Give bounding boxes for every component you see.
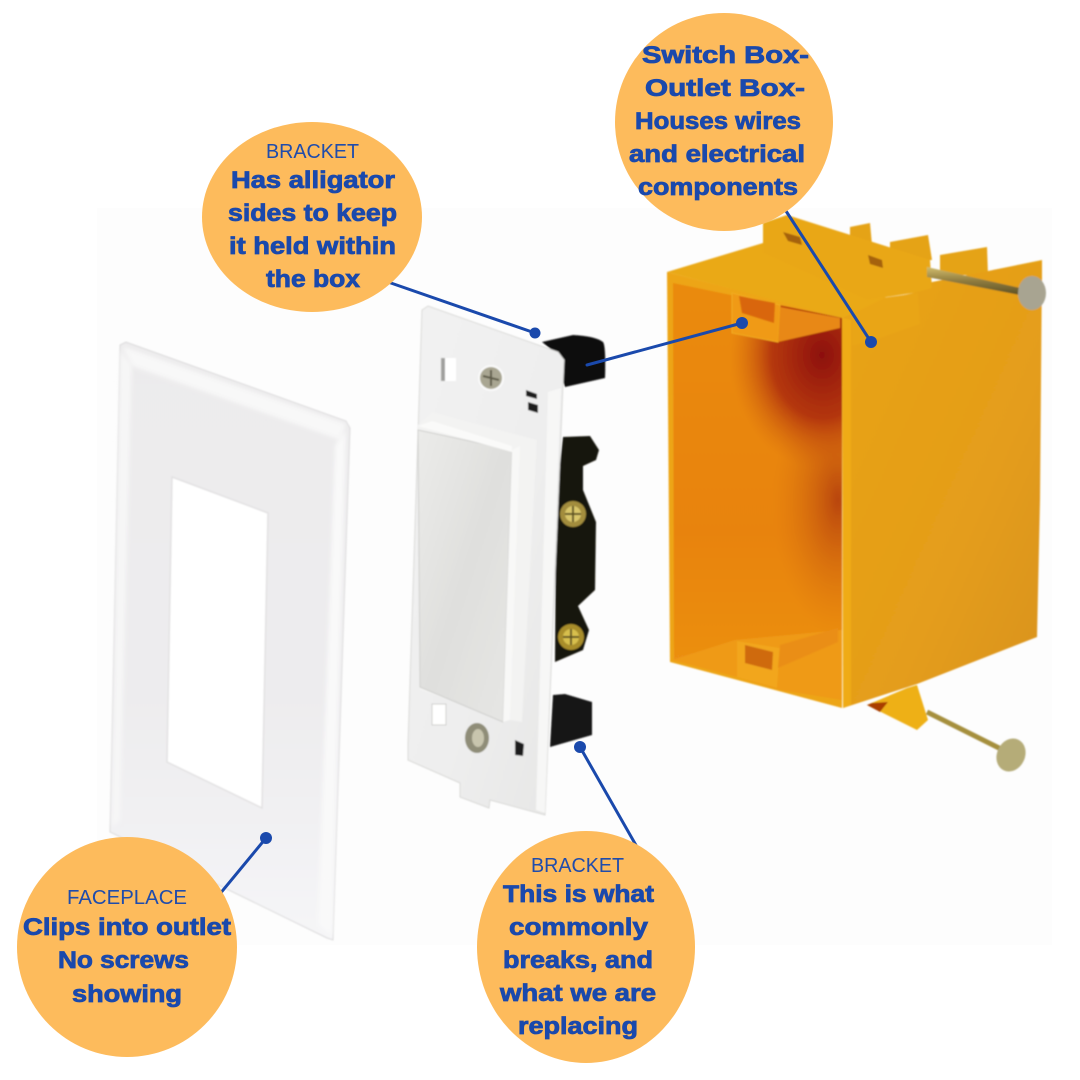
faceplate opening <box>167 477 268 808</box>
switch mechanism <box>408 306 605 815</box>
rocker bezel <box>418 412 537 722</box>
top face <box>667 243 930 318</box>
front interior <box>673 283 842 700</box>
switch mounting plate <box>408 306 564 815</box>
callout: bracket breaks: commonly <box>509 914 649 941</box>
callout: faceplate: Clips into outlet <box>23 914 231 941</box>
interior shadow <box>738 305 843 602</box>
side face <box>842 262 1042 708</box>
callout: switch box: Houses wires <box>635 108 801 135</box>
callout: faceplate: showing <box>72 981 182 1008</box>
top nail <box>927 267 1046 310</box>
callout: bracket alligator sides: BRACKET <box>266 141 359 163</box>
callout: faceplate: FACEPLACE <box>67 887 187 909</box>
callout: switch box: Switch Box- <box>642 42 809 69</box>
rocker paddle <box>418 430 512 722</box>
yellow switch box <box>667 215 1046 776</box>
side face bump <box>852 293 920 346</box>
plate slots <box>515 390 538 756</box>
callout: faceplate <box>17 837 237 1057</box>
callout: switch box <box>615 13 833 231</box>
callout: bracket breaks: This is what <box>503 881 654 908</box>
faceplate cover <box>110 342 350 940</box>
mounting screw bottom <box>465 723 489 753</box>
mounting holes <box>432 358 456 725</box>
callout: bracket breaks: what we are <box>499 980 656 1007</box>
mounting screw top <box>478 365 504 391</box>
front rim <box>667 272 842 708</box>
terminal screw lower <box>558 624 584 650</box>
bottom bracket and nail <box>867 685 1031 776</box>
callout: bracket alligator sides: Has alligator <box>231 167 395 194</box>
rear fins <box>850 223 1042 290</box>
callout: faceplate: No screws <box>58 947 189 974</box>
black switch body <box>555 436 599 662</box>
callout: bracket alligator sides: the box <box>266 266 361 293</box>
callout: bracket breaks: replacing <box>518 1013 638 1040</box>
callout: bracket breaks <box>477 831 695 1063</box>
callout: switch box: Outlet Box- <box>645 75 805 102</box>
callout: bracket alligator sides <box>202 122 422 312</box>
callout: bracket alligator sides: it held within <box>229 233 396 260</box>
photo background <box>97 208 1052 945</box>
callout connector lines <box>219 211 877 895</box>
callout: switch box: and electrical <box>629 141 805 168</box>
side face front edge <box>842 318 851 708</box>
inner channel top <box>732 293 780 342</box>
callout: bracket breaks: BRACKET <box>531 855 624 877</box>
terminal screw upper <box>560 501 586 527</box>
inner channel bottom <box>672 630 842 700</box>
lower black bracket tab <box>550 694 592 747</box>
callout: bracket alligator sides: sides to keep <box>228 200 397 227</box>
nail bracket <box>763 215 932 300</box>
callout: switch box: components <box>638 174 798 201</box>
upper black bracket tab <box>542 335 605 387</box>
callout: bracket breaks: breaks, and <box>503 947 653 974</box>
